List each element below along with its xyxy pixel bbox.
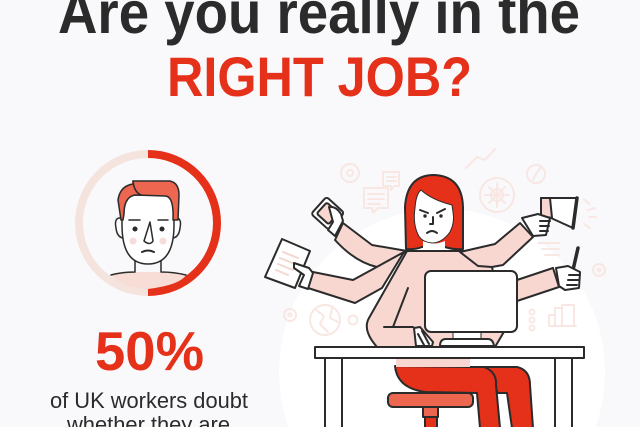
icon: small circle [348,316,358,324]
face [414,190,454,243]
icon: small target left [284,309,296,321]
torso [367,251,505,347]
stool [388,393,473,427]
icon: dots [530,310,534,330]
hair [405,175,463,249]
monitor [425,271,517,346]
sound rays [584,199,596,228]
desk [315,347,584,427]
icon: small target right [593,264,605,276]
background icons: pale work symbols [284,149,605,335]
arm: lower right [517,268,559,301]
arm: middle left [308,252,404,303]
icon: sound lines [538,243,559,255]
phone in hand [556,248,580,290]
neck [423,241,445,250]
statistic caption [50,388,248,427]
lap [396,358,470,367]
illustration: stressed woman with six arms at desk [265,175,596,427]
title: RIGHT JOB? [167,45,472,108]
arm: upper right [460,223,533,267]
icon: trend line [466,149,495,168]
megaphone in hand [522,198,577,236]
tablet in hand [311,197,344,236]
notepad in hand [265,239,313,289]
icon: network globe [480,178,514,212]
big statistic: 50%: 50% [95,320,204,382]
icon: clock [527,165,545,183]
trousers [483,367,533,427]
icon: speech bubbles [364,172,399,213]
statistic caption: of UK workers doubt [50,388,248,413]
hand on keyboard [414,327,433,346]
arm: upper left [335,223,407,267]
icon: worried man [111,181,186,289]
icon: bar chart [549,305,576,326]
icon: target [341,164,359,182]
title [58,0,580,108]
donut chart: 50 percent with worried man [79,154,217,292]
icon: globe [310,305,340,335]
torso details [384,288,413,327]
